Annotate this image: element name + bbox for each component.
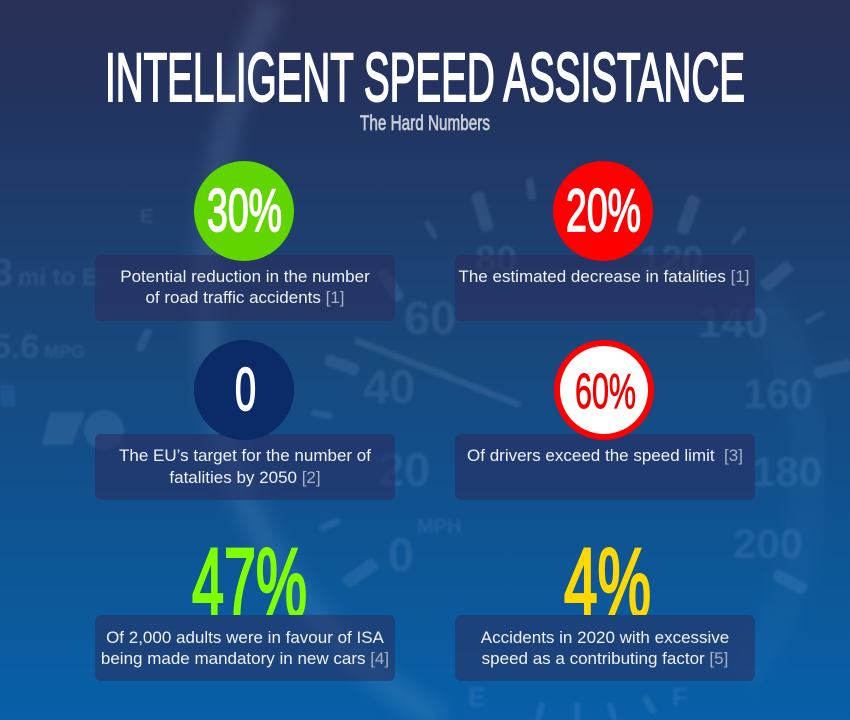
speedometer backdrop: 140 [698,299,768,346]
panel: 20% stat [455,161,755,321]
panel: 60% stat [455,343,755,500]
stat number: 20%: 20% [566,177,641,244]
caption: 30%: Potential reduction in the number [120,267,370,286]
caption box: 60% [455,434,755,500]
speedometer backdrop: 120 [640,239,703,281]
icon: navy circle [194,340,294,440]
speedometer backdrop: mi to E [18,264,98,291]
speedometer backdrop: 20 [378,443,430,496]
speedometer backdrop: E [140,206,153,228]
caption: 20%: The estimated decrease in fatalities [1] [458,267,750,286]
speedometer backdrop: E [468,682,485,712]
caption line two: 0: fatalities by 2050 [2] [169,468,321,487]
panel: 0 stat [95,340,395,500]
speedometer backdrop: 0 [388,528,414,581]
caption line two: 4%: speed as a contributing factor [5] [482,649,728,668]
caption box: 30% [95,255,395,321]
speedometer backdrop: 40 [363,360,415,413]
caption: 4%: Accidents in 2020 with excessive [481,628,729,647]
caption box: 4% [455,615,755,681]
caption: 0: The EU’s target for the number of [119,446,371,465]
stat number: 4%: 4% [564,528,651,638]
panel: 47% stat [95,547,395,681]
speedometer backdrop [0,178,850,720]
caption line two: 47%: being made mandatory in new cars [4] [101,649,389,668]
caption: 60%: Of drivers exceed the speed limit [3] [467,446,743,465]
speedometer backdrop: MPH [417,516,461,538]
caption line two: 30%: of road traffic accidents [1] [145,288,345,307]
speedometer backdrop: 180 [752,448,822,495]
panel: 30% stat [95,161,395,321]
stat number: 0: 0 [235,356,256,423]
speedometer backdrop: 160 [743,370,813,417]
speedometer backdrop: 200 [733,520,803,567]
stat number: 60%: 60% [575,365,636,419]
stat number: 30%: 30% [207,177,282,244]
caption box: 20% [455,255,755,321]
caption box: 0 [95,434,395,500]
speedometer backdrop: MPG [44,342,85,362]
subtitle: The Hard Numbers [360,112,490,135]
icon: green circle [194,161,294,261]
speedometer backdrop: 80 [475,239,517,281]
panel: 4% stat [455,547,755,681]
stat number: 47%: 47% [192,528,307,638]
speedometer backdrop: F [672,682,688,712]
speedometer backdrop: 60 [404,291,456,344]
icon: red circle [553,161,653,261]
icon: white circle with red ring [557,343,651,437]
caption: 47%: Of 2,000 adults were in favour of ISA [106,628,385,647]
caption box: 47% [95,615,395,681]
